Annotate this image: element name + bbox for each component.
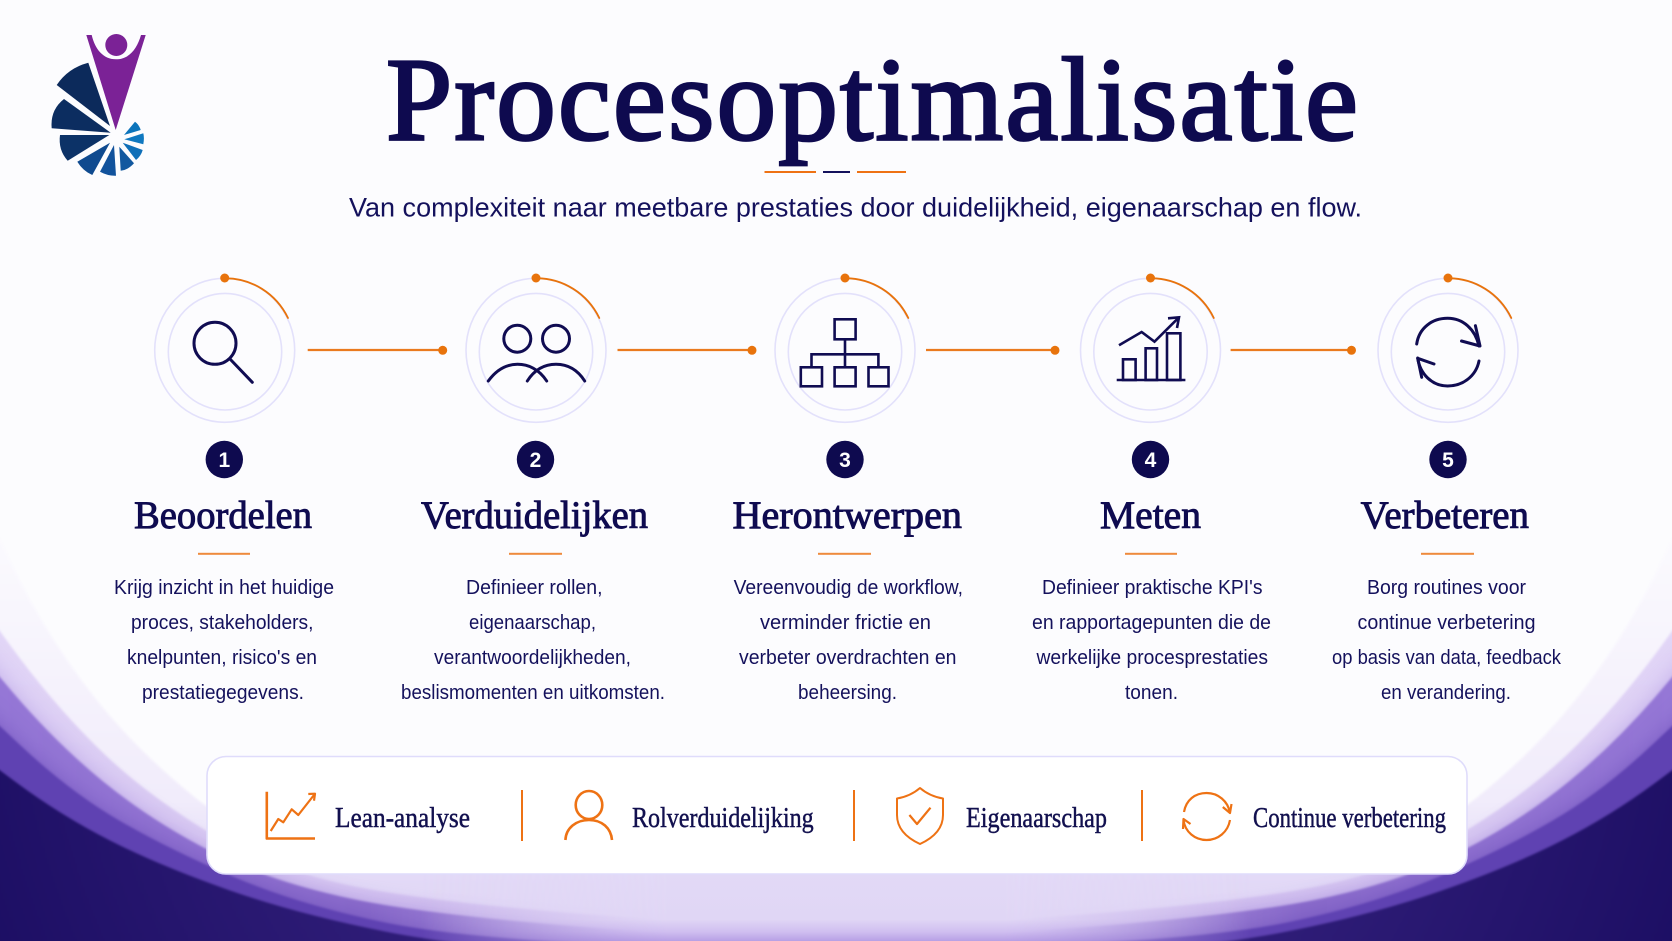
- step 5 number: 5: [1442, 449, 1454, 472]
- step 4: Meten: [1032, 274, 1271, 704]
- step 4 text: tonen.: [1125, 682, 1178, 704]
- label: Lean-analyse: Lean-analyse: [335, 802, 470, 834]
- step 3 text: beheersing.: [798, 682, 897, 704]
- step 1 heading: Beoordelen: [134, 494, 312, 537]
- step 3 text: [734, 577, 963, 704]
- step 4 text: en rapportagepunten die de: [1032, 612, 1271, 634]
- step 4 heading: Meten: [1100, 494, 1201, 537]
- step 5 text: op basis van data, feedback: [1332, 647, 1562, 669]
- step 4 text: Definieer praktische KPI's: [1042, 577, 1262, 599]
- title: Procesoptimalisatie: [386, 34, 1358, 166]
- logo fan: [52, 63, 144, 176]
- panel card: [207, 756, 1467, 874]
- step 1 rule: [198, 553, 250, 555]
- step 2 text: beslismomenten en uitkomsten.: [401, 682, 665, 704]
- step 3 rule: [818, 553, 871, 555]
- step 1 text: [114, 577, 334, 704]
- step 1 rings: [155, 274, 295, 422]
- step 5: Verbeteren: [1332, 274, 1562, 704]
- logo figure: [86, 35, 146, 130]
- subtitle: Van complexiteit naar meetbare prestaties door duidelijkheid, eigenaarschap en flow.: [349, 192, 1362, 222]
- arrow: step 4 to 5: [1231, 346, 1356, 355]
- logo: [52, 34, 146, 176]
- step 2 text: Definieer rollen,: [466, 577, 602, 599]
- step 3: Herontwerpen: [732, 274, 963, 704]
- icon: lean chart: [267, 792, 315, 838]
- step 1 text: proces, stakeholders,: [131, 612, 314, 634]
- icon: cycle: [1183, 793, 1232, 840]
- step 2 number: [517, 441, 554, 478]
- step 2 number: 2: [530, 449, 541, 472]
- title ornament: [764, 171, 906, 173]
- step 4 text: [1032, 577, 1271, 704]
- icon: shield: [897, 788, 943, 844]
- arrow: step 3 to 4: [926, 346, 1060, 355]
- step 3 rings: [775, 274, 915, 422]
- step 1 number: [206, 441, 243, 478]
- label: Eigenaarschap: Eigenaarschap: [966, 802, 1107, 834]
- step 2 heading: Verduidelijken: [421, 494, 648, 537]
- step 4 rule: [1125, 553, 1177, 555]
- step 4 number: 4: [1145, 449, 1157, 472]
- step 4 text: werkelijke procesprestaties: [1036, 647, 1268, 669]
- step 3 text: verminder frictie en: [760, 612, 931, 634]
- divider: [1141, 790, 1143, 841]
- step 1: Beoordelen: [114, 274, 334, 704]
- step 5 text: en verandering.: [1381, 682, 1511, 704]
- step 2 rule: [509, 553, 562, 555]
- icon: growth chart: [1117, 317, 1185, 380]
- step 1 text: prestatiegegevens.: [142, 682, 304, 704]
- step 3 number: 3: [839, 449, 851, 472]
- step 5 rule: [1421, 553, 1474, 555]
- label: Rolverduidelijking: Rolverduidelijking: [632, 802, 814, 834]
- step 2: Verduidelijken: [401, 274, 665, 704]
- step 1 number: 1: [218, 449, 230, 472]
- step 3 number: [826, 441, 864, 478]
- step 5 number: [1429, 441, 1467, 478]
- divider: [853, 790, 855, 841]
- label: Continue verbetering: Continue verbetering: [1253, 802, 1446, 834]
- step 3 heading: Herontwerpen: [732, 494, 962, 537]
- step 5 text: continue verbetering: [1358, 612, 1536, 634]
- step 2 text: [401, 577, 665, 704]
- step 2 rings: [466, 274, 606, 422]
- icon: cycle arrows: [1417, 318, 1480, 386]
- arrow: step 2 to 3: [618, 346, 756, 355]
- step 4 rings: [1080, 274, 1220, 422]
- step 1 text: Krijg inzicht in het huidige: [114, 577, 334, 599]
- step 1 text: knelpunten, risico's en: [127, 647, 317, 669]
- divider: [521, 790, 523, 841]
- step 3 text: Vereenvoudig de workflow,: [734, 577, 963, 599]
- step 5 rings: [1378, 274, 1518, 422]
- step 4 number: [1132, 441, 1169, 478]
- icon: org chart: [801, 319, 888, 386]
- step 5 heading: Verbeteren: [1361, 494, 1529, 537]
- step 2 text: verantwoordelijkheden,: [434, 647, 631, 669]
- icon: magnifier: [194, 322, 252, 382]
- step 5 text: Borg routines voor: [1367, 577, 1526, 599]
- step 3 text: verbeter overdrachten en: [739, 647, 956, 669]
- logo head: [105, 34, 127, 56]
- icon: person: [565, 791, 612, 840]
- step 5 text: [1332, 577, 1562, 704]
- step 2 text: eigenaarschap,: [469, 612, 596, 634]
- icon: people: [488, 325, 585, 381]
- panel: focus areas: [207, 756, 1467, 874]
- purple wave bands: [0, 628, 1672, 941]
- arrow: step 1 to 2: [308, 346, 447, 355]
